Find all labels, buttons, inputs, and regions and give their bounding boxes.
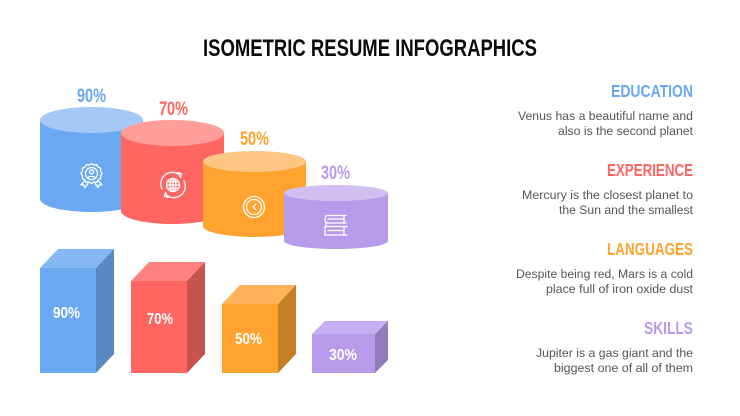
cylinder chart [40, 85, 388, 249]
description: experience: Mercury is the closest planet to [522, 188, 693, 202]
cylinder: experience 70% [121, 98, 224, 224]
label: 50%: 50% [235, 331, 262, 348]
description: languages: Despite being red, Mars is a cold [516, 267, 693, 281]
bar: 50% [222, 285, 296, 373]
bar: 70% [131, 262, 205, 373]
icon: clock [244, 196, 264, 218]
icon: award medal [81, 164, 102, 188]
text block: languages [516, 239, 694, 296]
description: skills: Jupiter is a gas giant and the [536, 346, 693, 360]
isometric bar chart [40, 249, 388, 373]
title: ISOMETRIC RESUME INFOGRAPHICS [203, 35, 537, 62]
cylinder: education 90% [40, 85, 143, 212]
description: languages: place full of iron oxide dust [546, 282, 694, 296]
text block: skills [536, 318, 693, 375]
label: 70%: 70% [147, 311, 173, 328]
bar: 30% [312, 321, 388, 373]
description: education: Venus has a beautiful name and [518, 109, 693, 123]
text block: education [518, 81, 694, 138]
description: education: also is the second planet [558, 124, 694, 138]
icon: stack of books [325, 216, 347, 235]
label: 30%: 30% [321, 162, 350, 184]
label: 90%: 90% [53, 305, 80, 322]
cylinder: languages 50% [203, 128, 306, 237]
text block: experience [522, 160, 694, 217]
description: skills: biggest one of all of them [554, 361, 693, 375]
heading: skills: SKILLS [644, 318, 693, 338]
label: 90%: 90% [77, 85, 106, 107]
icon: rotating globe [161, 172, 185, 198]
heading: languages: LANGUAGES [607, 239, 693, 259]
label: 70%: 70% [159, 98, 188, 120]
description: languages [516, 267, 694, 296]
description: experience [522, 188, 694, 217]
description: experience: the Sun and the smallest [559, 203, 694, 217]
description: education [518, 109, 694, 138]
description: skills [536, 346, 693, 375]
heading: education: EDUCATION [611, 81, 693, 101]
bar: 90% [40, 249, 114, 373]
label: 30%: 30% [329, 347, 357, 364]
cylinder: skills 30% [284, 162, 388, 249]
heading: experience: EXPERIENCE [607, 160, 693, 180]
label: 50%: 50% [240, 128, 269, 150]
